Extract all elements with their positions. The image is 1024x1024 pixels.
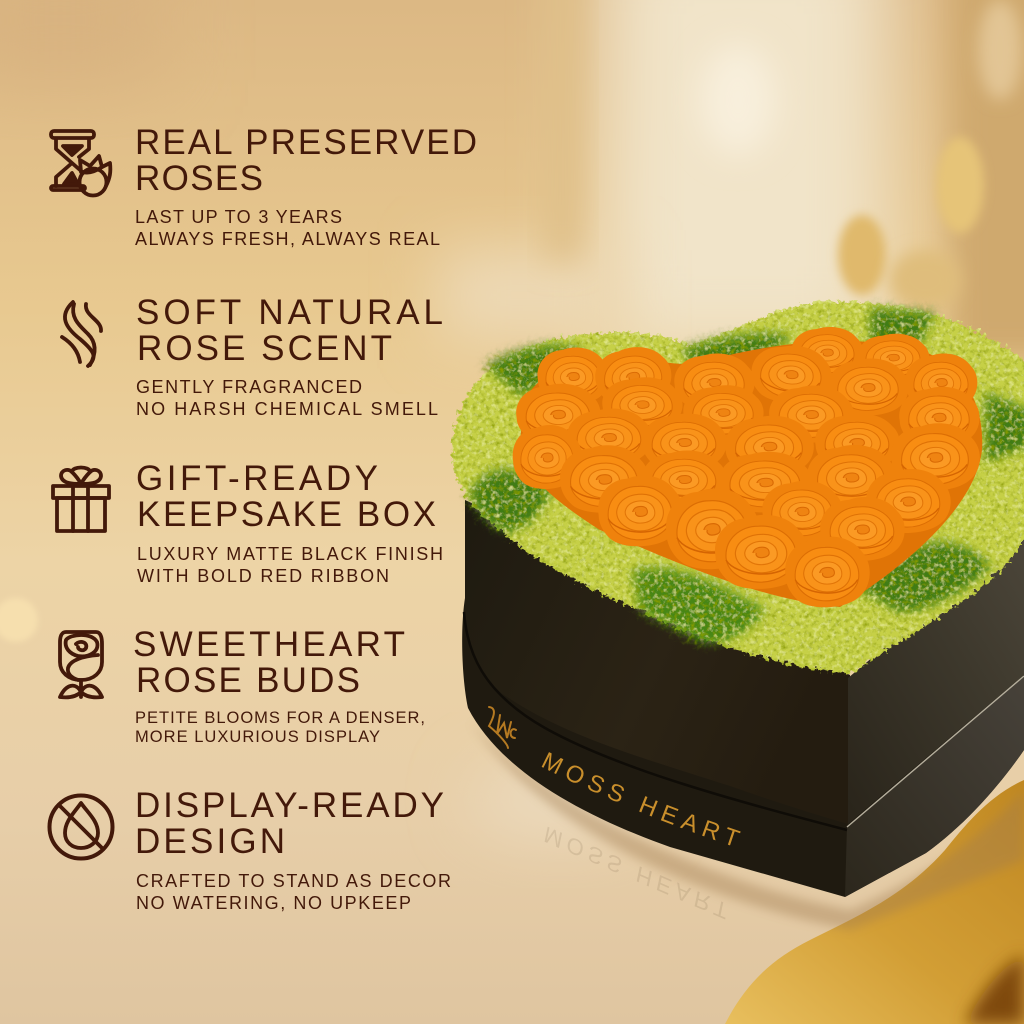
- heading: SOFT NATURAL: [136, 293, 443, 332]
- box upper front: [465, 500, 850, 824]
- feature 3: gift-ready keepsake box: WITH BOLD RED RIBBON: [137, 566, 389, 586]
- description: CRAFTED TO STAND AS DECOR: [136, 871, 451, 891]
- heading: SWEETHEART: [133, 625, 405, 664]
- feature 2: soft natural rose scent: NO HARSH CHEMICAL SMELL: [136, 399, 438, 419]
- feature 4: sweetheart rose buds: [60, 625, 425, 746]
- heading: GIFT-READY: [136, 459, 378, 498]
- box lower band: [462, 598, 1024, 897]
- feature 2: soft natural rose scent: ROSE SCENT: [137, 329, 392, 368]
- description: PETITE BLOOMS FOR A DENSER,: [135, 709, 425, 727]
- feature 3: gift-ready keepsake box: [53, 459, 443, 586]
- icon: gift box: [53, 468, 109, 531]
- rose heart: [513, 327, 982, 607]
- rose base: [520, 341, 982, 607]
- feature 5: display-ready design: NO WATERING, NO UPKEEP: [136, 893, 411, 913]
- feature 1: real preserved roses: ALWAYS FRESH, ALWAYS REAL: [135, 229, 440, 249]
- feature 1: real preserved roses: ROSES: [135, 159, 263, 198]
- band right side: [845, 676, 1024, 897]
- icon: hourglass with rose: [51, 131, 110, 196]
- feature 4: sweetheart rose buds: ROSE BUDS: [136, 661, 360, 700]
- feature 4: sweetheart rose buds: MORE LUXURIOUS DISPLAY: [135, 728, 380, 746]
- moss ring: [452, 302, 1024, 674]
- heading: DISPLAY-READY: [135, 786, 444, 825]
- feature 1: real preserved roses: [51, 123, 477, 249]
- box shadow on table: [470, 720, 1024, 930]
- feature 5: display-ready design: DESIGN: [135, 822, 285, 861]
- brand name: MOSS HEART: [542, 752, 741, 846]
- reflection: brand name on table: MOSS HEART: [542, 821, 734, 927]
- heading: REAL PRESERVED: [135, 123, 477, 162]
- description: LAST UP TO 3 YEARS: [135, 207, 342, 227]
- feature 5: display-ready design: [50, 786, 451, 913]
- icon: rose: [60, 632, 102, 697]
- icon: no water: [50, 796, 112, 858]
- icon: scent waves: [62, 302, 101, 366]
- brand logo: [489, 707, 516, 748]
- description: LUXURY MATTE BLACK FINISH: [137, 544, 443, 564]
- feature 3: gift-ready keepsake box: KEEPSAKE BOX: [137, 495, 436, 534]
- cloth: gold satin: [725, 780, 1024, 1024]
- box upper right: [848, 530, 1024, 824]
- feature 2: soft natural rose scent: [62, 293, 443, 419]
- description: GENTLY FRAGRANCED: [136, 377, 362, 397]
- gift box: [462, 500, 1024, 897]
